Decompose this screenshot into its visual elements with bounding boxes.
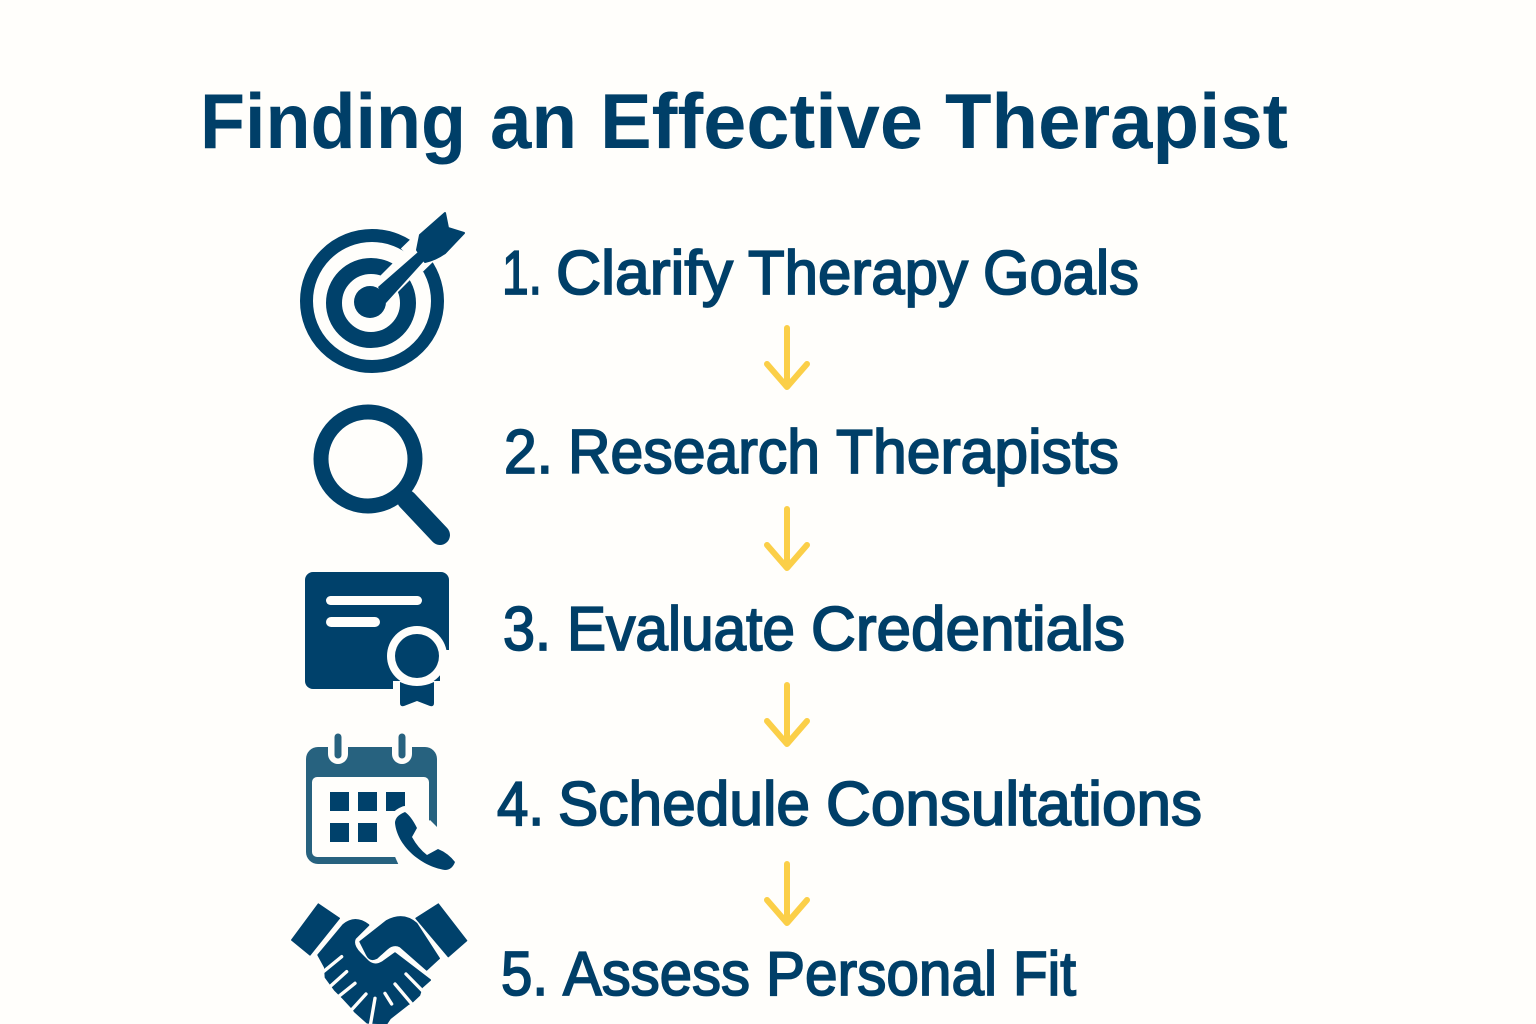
icon: target with arrow: [306, 213, 464, 366]
step 5 label: 5.: [501, 940, 548, 1009]
title: Therapist: [945, 77, 1288, 165]
title: Effective: [600, 77, 923, 165]
step 4 label: Consultations: [826, 770, 1202, 839]
arrow 4 to 5: [767, 864, 807, 923]
step 1 label: Goals: [983, 239, 1139, 308]
icon: certificate with ribbon seal: [305, 572, 451, 706]
step 2 label: Research: [568, 418, 820, 487]
arrow 2 to 3: [767, 509, 807, 568]
step 3 label: Credentials: [811, 595, 1125, 664]
step 2 label: Therapists: [836, 418, 1119, 487]
icon: magnifying glass: [321, 412, 440, 535]
icon: calendar with phone: [306, 737, 455, 870]
step 4 label: 4.: [497, 770, 544, 839]
step 1 label: Clarify: [556, 239, 733, 308]
title: Finding: [200, 77, 466, 165]
icon: handshake: [292, 904, 467, 1023]
step 5 label: Assess: [563, 940, 750, 1009]
arrow 3 to 4: [767, 685, 807, 744]
step 5 label: Fit: [1013, 940, 1076, 1009]
step 1 label: Therapy: [748, 239, 968, 308]
step 5 label: Personal: [766, 940, 997, 1009]
arrow 1 to 2: [767, 328, 807, 387]
step 4 label: Schedule: [558, 770, 810, 839]
step 3 label: 3.: [503, 595, 551, 664]
step 2 label: 2.: [504, 418, 553, 487]
title: an: [490, 77, 577, 165]
step 3 label: Evaluate: [567, 595, 795, 664]
step 1 label: 1.: [502, 239, 542, 308]
